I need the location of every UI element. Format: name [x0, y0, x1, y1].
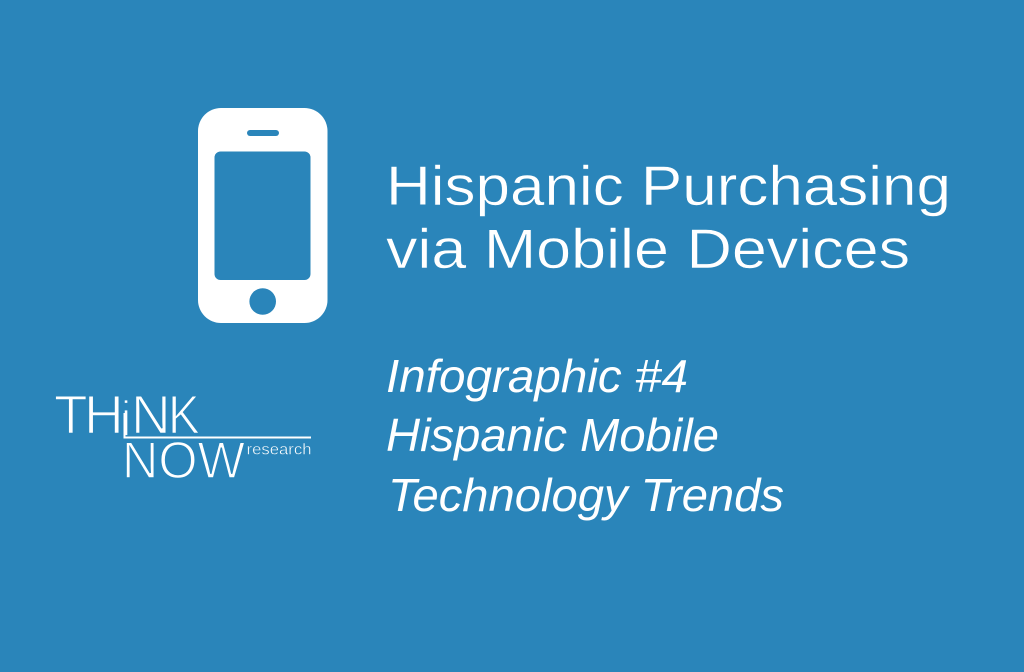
logo: ThinkNow Research: H: [84, 384, 124, 446]
icon: smartphone: [198, 108, 328, 323]
title: [386, 154, 951, 280]
subtitle: Technology Trends: [388, 469, 784, 521]
title: via Mobile Devices: [386, 217, 910, 280]
logo: ThinkNow Research: [54, 384, 312, 490]
logo: ThinkNow Research: T: [54, 384, 88, 446]
logo: ThinkNow Research: research: [246, 442, 312, 458]
subtitle: [386, 350, 784, 521]
subtitle: Infographic #4: [386, 350, 688, 402]
logo: ThinkNow Research: i: [120, 391, 132, 447]
logo: ThinkNow Research: NOW: [122, 432, 245, 490]
logo: ThinkNow Research: N: [131, 384, 171, 446]
title: Hispanic Purchasing: [386, 154, 951, 217]
subtitle: Hispanic Mobile: [386, 409, 719, 461]
logo: ThinkNow Research: K: [168, 384, 200, 446]
